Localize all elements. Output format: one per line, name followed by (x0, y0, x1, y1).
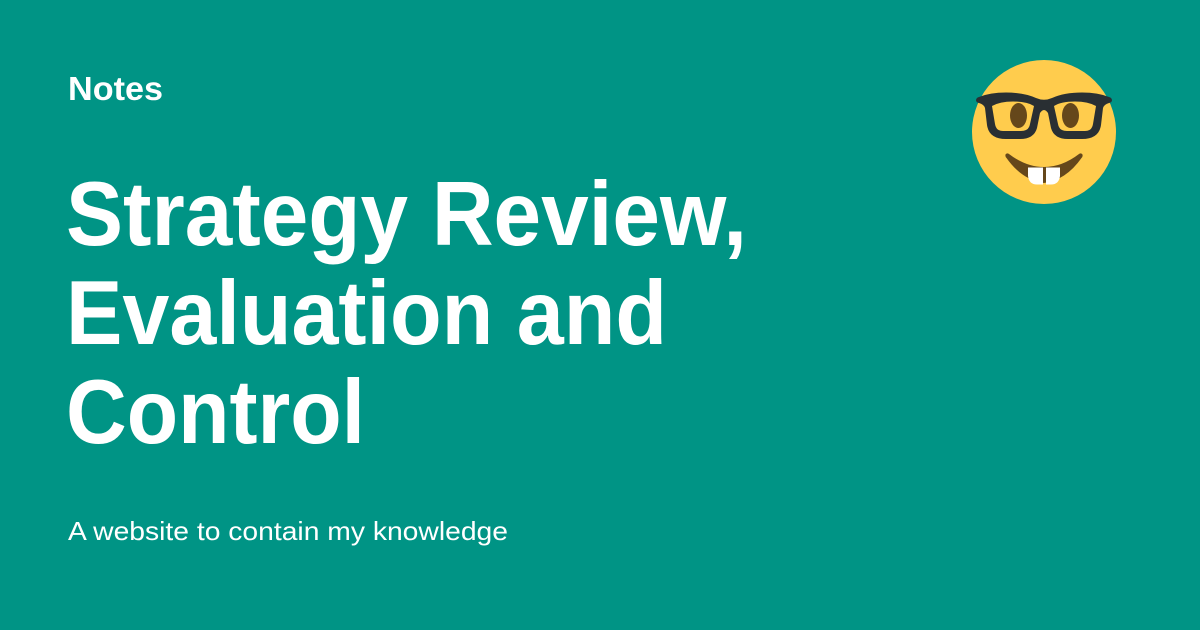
site name: Notes (68, 70, 163, 107)
title: Control (66, 362, 365, 463)
title (66, 164, 747, 463)
title: Strategy Review, (66, 164, 747, 265)
icon: nerd face emoji (972, 60, 1116, 204)
tagline: A website to contain my knowledge (68, 516, 508, 546)
title: Evaluation and (66, 263, 667, 364)
